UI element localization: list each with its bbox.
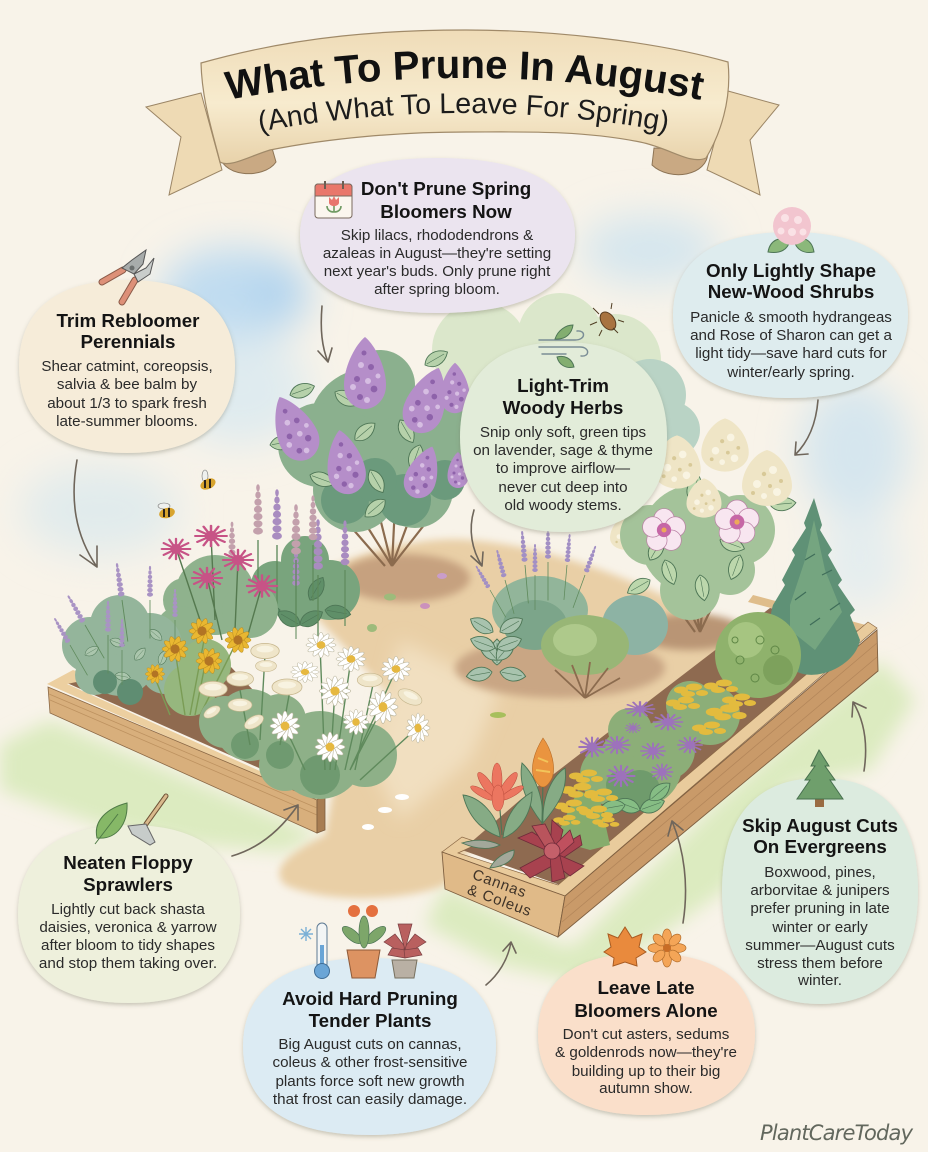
panel: don't prune spring bloomers (300, 158, 575, 313)
cannas goldenrod and coleus (462, 738, 619, 882)
ribbon body (201, 30, 729, 164)
body text: old woody stems. (504, 497, 622, 514)
panel: light-trim woody herbs (460, 342, 667, 532)
heading: Tender Plants (309, 1010, 431, 1031)
body text: Boxwood, pines, (764, 864, 876, 881)
arrow: to herbs (471, 510, 483, 566)
watercolor sky washes (20, 215, 910, 610)
body text: coleus & other frost-sensitive (272, 1054, 468, 1071)
arrow: to daisies (232, 805, 298, 856)
heading: Bloomers Alone (574, 1000, 718, 1021)
hydrangea and rose of sharon shrub (610, 418, 796, 632)
bed label: Cannas (470, 866, 529, 901)
body text: never cut deep into (498, 479, 628, 496)
heading: Only Lightly Shape (706, 260, 876, 281)
watermark: PlantCareToday (760, 1121, 914, 1145)
body text: Shear catmint, coreopsis, (41, 358, 213, 375)
spike perennials (228, 484, 360, 639)
coleus (518, 820, 584, 882)
body text: azaleas in August—they're setting (323, 245, 551, 262)
title ribbon (145, 29, 780, 196)
heading: Don't Prune Spring (361, 178, 531, 199)
body text: and stop them taking over. (39, 955, 217, 972)
body text: Skip lilacs, rhododendrons & (341, 227, 533, 244)
canna leaves (462, 763, 566, 868)
heading: On Evergreens (753, 836, 887, 857)
heading: Avoid Hard Pruning (282, 988, 458, 1009)
arrow: to asters (668, 821, 686, 923)
icon: maple leaf and flower (604, 927, 686, 967)
heading: Sprawlers (83, 874, 173, 895)
body text: winter/early spring. (726, 364, 855, 381)
ribbon left tail (146, 93, 222, 195)
ribbon right fold (652, 148, 708, 175)
body text: Don't cut asters, sedums (563, 1026, 730, 1043)
bee balm (156, 526, 278, 654)
orange canna flower (532, 738, 554, 787)
right raised bed (442, 595, 878, 937)
body text: winter or early (771, 919, 868, 936)
panel: leave late bloomers alone (538, 953, 755, 1115)
body text: Snip only soft, green tips (480, 424, 647, 441)
heading: Skip August Cuts (742, 815, 898, 836)
left raised bed (47, 640, 330, 833)
bees (158, 470, 217, 520)
heading: Leave Late (597, 977, 695, 998)
panel: only lightly shape new-wood shrubs (673, 232, 908, 398)
pale background trees (432, 293, 700, 466)
body text: after bloom to tidy shapes (41, 937, 215, 954)
ribbon left fold (219, 148, 276, 174)
body text: plants force soft new growth (275, 1073, 465, 1090)
heading: Woody Herbs (503, 397, 623, 418)
icon: leaf and rake (95, 796, 166, 845)
body text: to improve airflow— (496, 460, 631, 477)
body text: stress them before (757, 955, 883, 972)
body text: summer—August cuts (745, 937, 895, 954)
lilac shrub (261, 337, 472, 566)
body text: daisies, veronica & yarrow (39, 919, 217, 936)
body text: autumn show. (599, 1080, 693, 1097)
arrow: to catmint (74, 460, 97, 567)
heading: New-Wood Shrubs (708, 281, 874, 302)
body text: winter. (797, 972, 842, 989)
goldenrod (553, 770, 619, 850)
icon: wind leaf and beetle (539, 303, 624, 368)
body text: on lavender, sage & thyme (473, 442, 653, 459)
body text: light tidy—save hard cuts for (695, 345, 887, 362)
body text: prefer pruning in late (750, 900, 890, 917)
panel: skip august cuts on evergreens (722, 778, 918, 1004)
title sub line: (And What To Leave For Spring) (260, 94, 668, 136)
arrow: to evergreen (852, 702, 866, 771)
evergreen and boxwood (715, 498, 860, 698)
sandy path (279, 539, 745, 898)
red canna flower (469, 763, 525, 811)
icon: pruning shears (102, 250, 154, 302)
heading: Bloomers Now (380, 201, 512, 222)
body text: late-summer blooms. (56, 413, 198, 430)
bed label: & Coleus (465, 881, 534, 920)
icon: hydrangea bloom (768, 207, 814, 252)
herbs: lavender sage thyme (465, 528, 668, 698)
panel: trim rebloomer perennials (19, 280, 235, 453)
yarrow and daisies (199, 632, 430, 799)
goldenrod and asters (579, 680, 756, 816)
heading: Neaten Floppy (63, 852, 193, 873)
body text: after spring bloom. (374, 281, 500, 298)
body text: and Rose of Sharon can get a (690, 327, 892, 344)
body text: building up to their big (572, 1063, 720, 1080)
panel: neaten floppy sprawlers (18, 825, 240, 1003)
body text: that frost can easily damage. (273, 1091, 467, 1108)
catmint (52, 563, 189, 705)
body text: arborvitae & junipers (750, 882, 890, 899)
arrow: to lilac (318, 306, 332, 362)
scattered petals (362, 573, 506, 830)
body text: next year's buds. Only prune right (324, 263, 551, 280)
heading: Trim Rebloomer (57, 310, 200, 331)
ribbon right tail (707, 91, 779, 195)
body text: & goldenrods now—they're (555, 1044, 737, 1061)
body text: Big August cuts on cannas, (278, 1036, 462, 1053)
arrow: to cannas (486, 942, 516, 985)
icon: thermometer and potted plants (299, 905, 426, 978)
body text: about 1/3 to spark fresh (47, 395, 207, 412)
panel: avoid hard pruning tender plants (243, 958, 496, 1135)
heading: Light-Trim (517, 375, 609, 396)
heading: Perennials (80, 331, 176, 352)
body text: Lightly cut back shasta (51, 901, 205, 918)
title main line: What To Prune In August (223, 52, 704, 100)
arrow: to hydrangea (795, 400, 818, 455)
icon: pine tree (797, 750, 843, 807)
body text: salvia & bee balm by (57, 376, 197, 393)
grass washes (0, 660, 915, 985)
coreopsis (145, 618, 251, 716)
body text: Panicle & smooth hydrangeas (690, 309, 892, 326)
icon: calendar with tulip (315, 181, 352, 218)
